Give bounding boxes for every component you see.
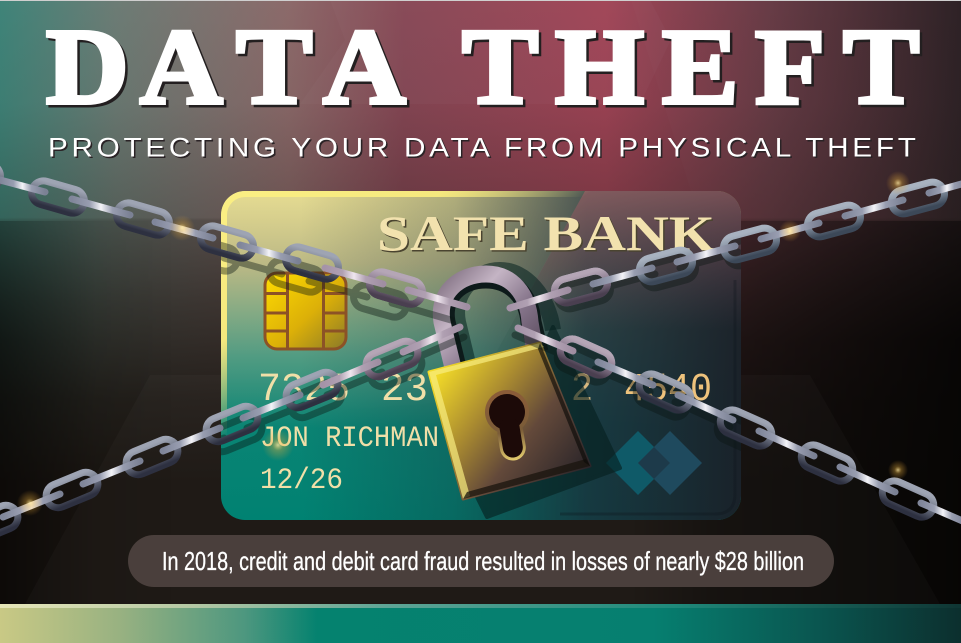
- subtitle: PROTECTING YOUR DATA FROM PHYSICAL THEFT: [50, 134, 917, 165]
- icon: card logo diamonds: [606, 431, 702, 495]
- bank name: SAFE BANK: [377, 205, 715, 261]
- padlock shadow: [457, 270, 620, 517]
- cardholder name: JON RICHMAN: [260, 422, 439, 456]
- credit card: [221, 191, 741, 520]
- card number: 2: [571, 368, 593, 413]
- chip: [265, 273, 346, 349]
- chain glints: [17, 171, 910, 516]
- keyhole: [482, 387, 537, 464]
- card number: [258, 368, 712, 413]
- subtitle: PROTECTING YOUR DATA FROM PHYSICAL THEFT: [48, 133, 916, 163]
- title: DATA THEFT: [49, 10, 922, 130]
- chain: lower right: [518, 328, 961, 522]
- chain: upper right: [510, 179, 961, 308]
- chain: upper left: [0, 153, 467, 307]
- shackle: [441, 274, 538, 372]
- card number: 23: [381, 368, 428, 413]
- bank name: SAFE BANK: [378, 206, 717, 262]
- chain: lower left: [0, 327, 460, 544]
- card number: 4540: [624, 368, 712, 413]
- title: DATA THEFT: [46, 8, 919, 127]
- card body: [221, 191, 741, 520]
- callout: fraud statistic: [128, 535, 834, 587]
- padlock: [429, 270, 620, 517]
- bottom colour strip: [0, 604, 961, 643]
- chain shadows on card: [221, 238, 741, 456]
- lock body: [429, 343, 590, 499]
- expiry date: 12/26: [260, 464, 343, 498]
- card number: 7325: [258, 368, 350, 413]
